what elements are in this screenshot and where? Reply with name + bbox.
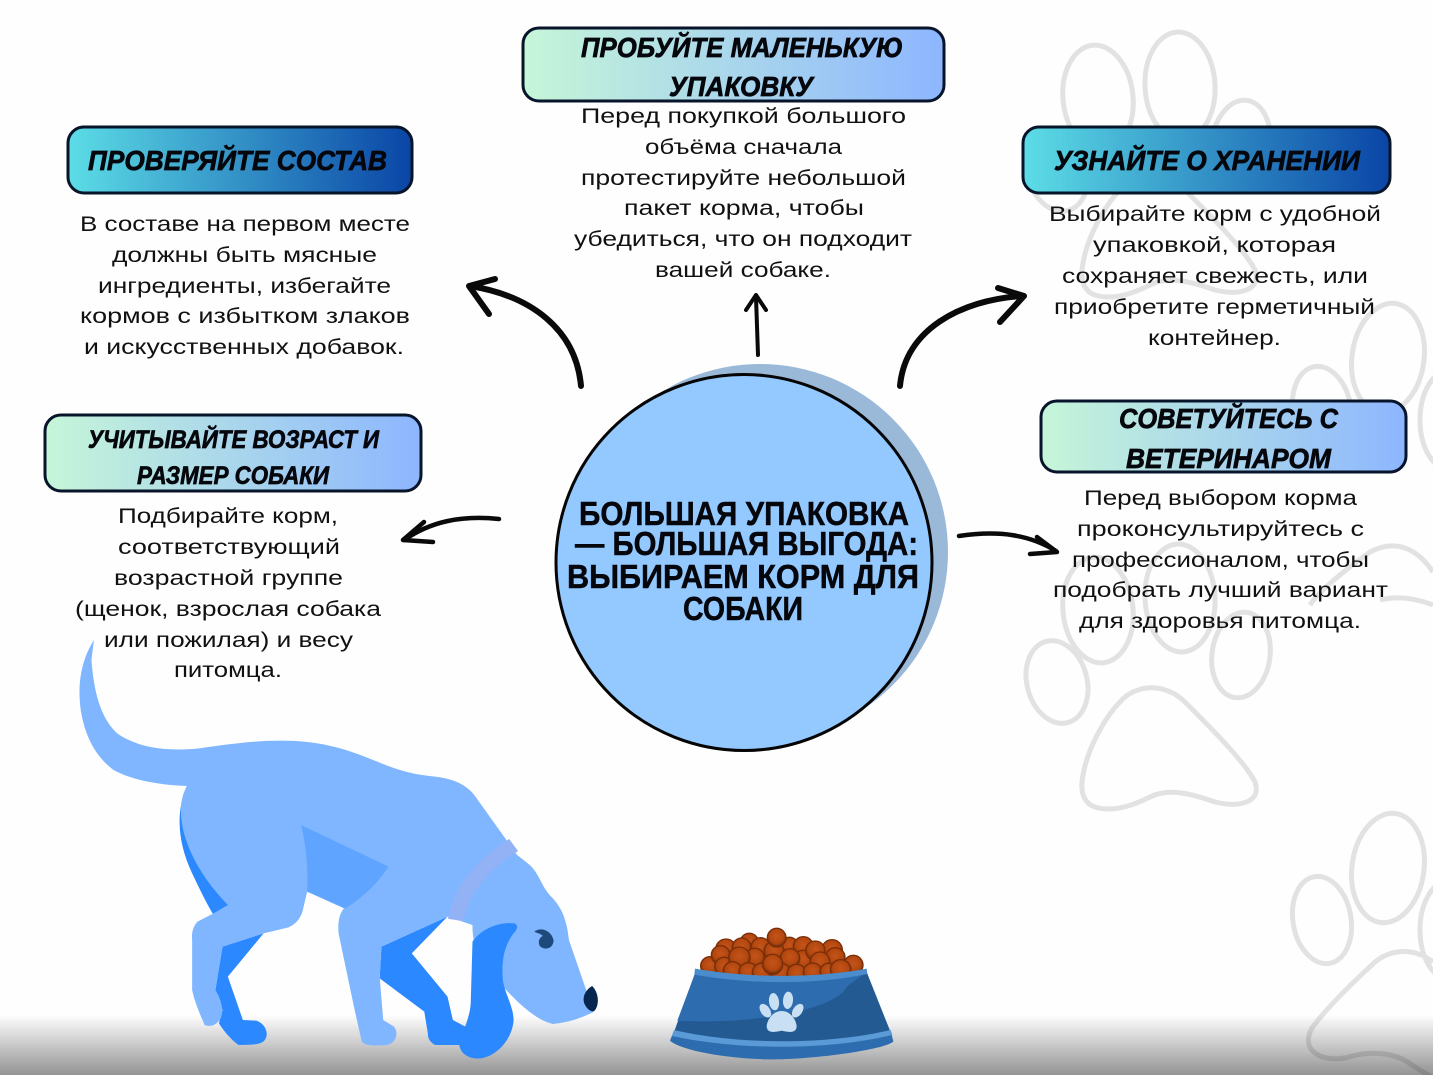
dog: belly shadow (301, 825, 389, 908)
central circle with title: ВЫБИРАЕМ КОРМ ДЛЯ (567, 558, 919, 595)
arrow: to storage (900, 288, 1024, 386)
background paw: top right (1017, 30, 1276, 297)
dog illustration (80, 640, 598, 1059)
central circle with title (556, 364, 948, 750)
food bowl (670, 928, 893, 1059)
text: try small pack: объёма сначала (645, 136, 842, 159)
text: storage: Выбирайте корм с удобной (1049, 203, 1381, 226)
arrow: to small pack (746, 295, 766, 355)
text: age and size (75, 505, 381, 682)
text: storage: приобретите герметичный (1054, 296, 1375, 319)
bowl: paw print (757, 991, 806, 1032)
text: age and size: (щенок, взрослая собака (75, 598, 381, 621)
text: try small pack: вашей собаке. (655, 259, 831, 282)
header: try small pack: ПРОБУЙТЕ МАЛЕНЬКУЮ (581, 31, 903, 63)
text: try small pack: убедиться, что он подходит (574, 228, 912, 251)
dog: nose (584, 986, 598, 1011)
text: age and size: возрастной группе (114, 567, 343, 590)
text: try small pack: Перед покупкой большого (581, 105, 906, 128)
arrow: to age and size (403, 518, 499, 542)
text: ask a vet: подобрать лучший вариант (1053, 579, 1388, 602)
text: ask a vet: для здоровья питомца. (1079, 610, 1361, 633)
text: storage (1049, 203, 1381, 350)
text: age and size: Подбирайте корм, (118, 505, 338, 528)
text: storage: упаковкой, которая (1093, 234, 1336, 257)
header: check ingredients (68, 127, 412, 193)
text: age and size: питомца. (174, 659, 282, 682)
text: storage: контейнер. (1148, 327, 1281, 350)
text: check ingredients: кормов с избытком злаков (80, 305, 410, 328)
text: storage: сохраняет свежесть, или (1062, 265, 1368, 288)
bowl: body (673, 972, 891, 1048)
text: check ingredients: и искусственных добавок. (84, 336, 404, 359)
arrow: to ingredients (469, 279, 581, 386)
header: ask a vet (1041, 401, 1406, 474)
text: age and size: соответствующий (118, 536, 340, 559)
background paw: centre right (1017, 542, 1276, 809)
floor shadow (0, 1015, 1433, 1075)
header: storage: УЗНАЙТЕ О ХРАНЕНИИ (1054, 144, 1361, 176)
background paw: bottom right (1286, 809, 1433, 1075)
dog: far legs and flank (180, 797, 465, 1045)
text: ask a vet (1053, 487, 1388, 633)
header: try small pack (523, 28, 944, 102)
text: check ingredients (80, 213, 410, 359)
arrow: to vet (959, 534, 1057, 554)
text: check ingredients: В составе на первом месте (80, 213, 410, 236)
bowl: rim and base (694, 969, 867, 982)
central circle with title: БОЛЬШАЯ УПАКОВКА (579, 495, 909, 532)
text: try small pack (574, 105, 912, 282)
text: ask a vet: Перед выбором корма (1084, 487, 1357, 510)
background paw: right middle (1286, 299, 1433, 605)
dog: eye (534, 929, 554, 949)
header: try small pack: УПАКОВКУ (669, 71, 815, 102)
text: try small pack: пакет корма, чтобы (624, 197, 864, 220)
text: ask a vet: профессионалом, чтобы (1072, 549, 1369, 572)
text: ask a vet: проконсультируйтесь с (1077, 518, 1364, 541)
central circle with title: СОБАКИ (683, 590, 803, 627)
header: age and size (45, 415, 421, 491)
header: ask a vet: ВЕТЕРИНАРОМ (1126, 443, 1332, 474)
header: storage (1023, 127, 1390, 193)
header: age and size: УЧИТЫВАЙТЕ ВОЗРАСТ И (88, 424, 380, 454)
dog: collar (456, 845, 514, 920)
header: ask a vet: СОВЕТУЙТЕСЬ С (1119, 402, 1339, 434)
header: check ingredients: ПРОВЕРЯЙТЕ СОСТАВ (88, 144, 387, 176)
central circle with title: — БОЛЬШАЯ ВЫГОДА: (575, 525, 918, 562)
text: check ingredients: ингредиенты, избегайте (98, 275, 391, 298)
bowl: kibble (701, 928, 863, 984)
text: age and size: или пожилая) и весу (104, 629, 354, 652)
dog: ear (459, 923, 517, 1059)
dog: body (80, 640, 594, 1046)
header: age and size: РАЗМЕР СОБАКИ (137, 462, 330, 490)
text: check ingredients: должны быть мясные (112, 244, 377, 267)
text: try small pack: протестируйте небольшой (581, 167, 906, 190)
